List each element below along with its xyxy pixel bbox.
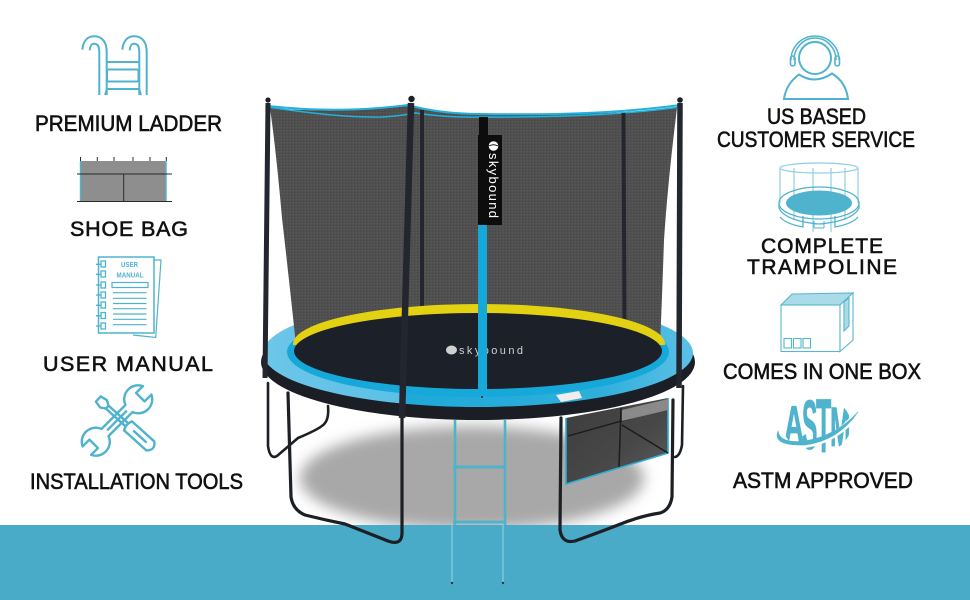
icon: box bbox=[781, 293, 853, 352]
icon: manual: USER bbox=[121, 260, 138, 269]
icon: astm logo: T bbox=[816, 384, 831, 468]
back poles bbox=[422, 110, 624, 323]
icon: crossed tools bbox=[77, 380, 157, 461]
feature: astm approved bbox=[732, 399, 912, 488]
ladder feet bbox=[451, 582, 504, 584]
jumping mat bbox=[294, 313, 662, 389]
ground shadow bbox=[300, 426, 644, 530]
front legs bbox=[288, 393, 673, 542]
label: ASTM APPROVED bbox=[733, 468, 913, 493]
net top rail bbox=[268, 105, 680, 117]
icon: trampoline bbox=[779, 163, 859, 232]
label bbox=[747, 235, 897, 279]
trampoline frame edge bbox=[261, 304, 695, 420]
icon: astm logo: M bbox=[830, 397, 851, 459]
feature: installation tools bbox=[30, 380, 243, 494]
trampoline product photo bbox=[261, 96, 695, 584]
mat logo: skybound bbox=[459, 345, 523, 357]
label: USER MANUAL bbox=[43, 352, 213, 376]
feature: complete trampoline bbox=[747, 163, 897, 279]
feature: one box bbox=[723, 293, 921, 384]
feature: user manual bbox=[43, 257, 213, 376]
icon: astm logo bbox=[776, 399, 858, 452]
pad inner band bbox=[287, 307, 669, 397]
icon: shoe bag bbox=[77, 157, 172, 202]
enclosure net bbox=[270, 106, 677, 345]
brand tag bbox=[478, 117, 502, 225]
icon: manual: MANUAL bbox=[116, 270, 144, 280]
ladder bbox=[452, 420, 505, 583]
label bbox=[717, 104, 915, 152]
label: TRAMPOLINE bbox=[747, 256, 897, 279]
feature: premium ladder bbox=[35, 40, 222, 136]
icon: ladder bbox=[86, 40, 143, 96]
label: PREMIUM LADDER bbox=[35, 111, 222, 136]
brand tag: skybound bbox=[486, 153, 501, 218]
label: INSTALLATION TOOLS bbox=[30, 469, 243, 494]
label: COMPLETE bbox=[761, 235, 883, 258]
blue spring pad bbox=[263, 299, 693, 407]
label: CUSTOMER SERVICE bbox=[717, 127, 915, 152]
label: US BASED bbox=[767, 104, 866, 129]
icon: astm logo: S bbox=[802, 387, 817, 465]
label: COMES IN ONE BOX bbox=[723, 359, 921, 384]
strap knot bbox=[481, 396, 483, 398]
safety sticker bbox=[556, 391, 582, 402]
centre blue strap bbox=[478, 225, 487, 395]
icon: astm logo: A bbox=[784, 395, 804, 453]
pole caps bbox=[265, 96, 683, 103]
icon: headset person bbox=[784, 36, 848, 99]
back legs bbox=[268, 383, 683, 457]
yellow mat edge bbox=[293, 304, 665, 345]
front poles bbox=[265, 103, 680, 418]
feature: shoe bag bbox=[70, 157, 188, 241]
feature: customer service bbox=[717, 36, 915, 152]
background band bbox=[0, 525, 970, 600]
storage bag bbox=[566, 398, 668, 484]
icon: manual bbox=[96, 257, 161, 338]
label: SHOE BAG bbox=[70, 217, 188, 241]
